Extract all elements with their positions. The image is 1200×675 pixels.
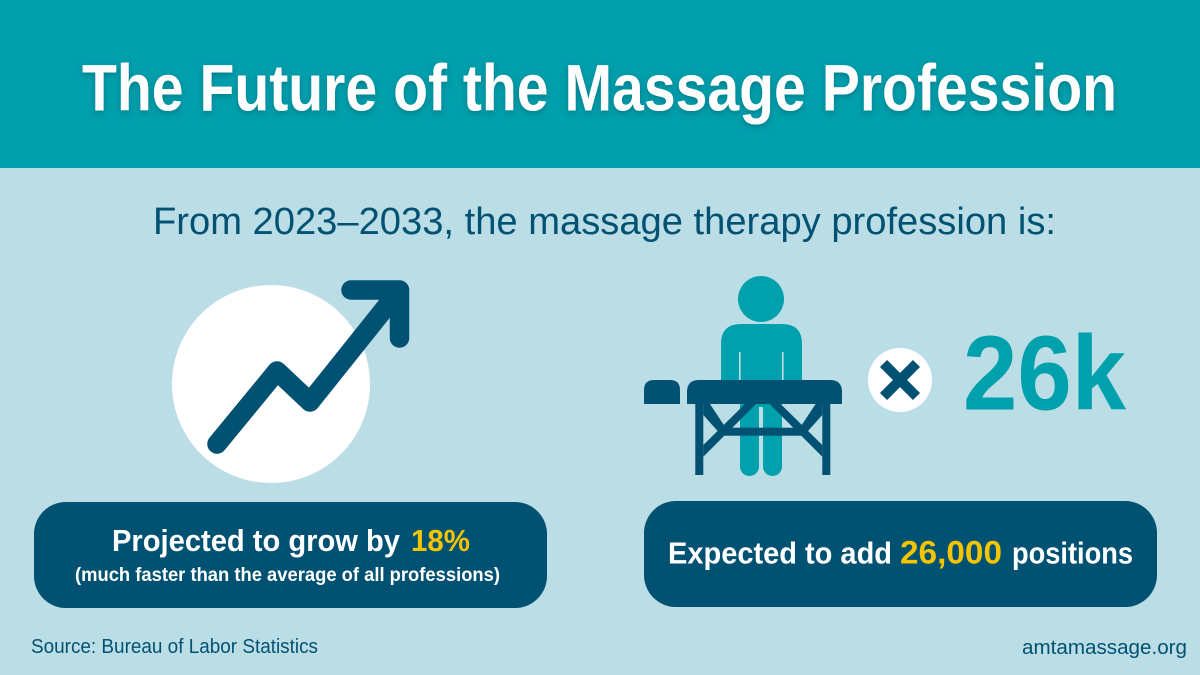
panel: growth callout bbox=[34, 502, 547, 608]
callout note: (much faster than the average of all professions) bbox=[75, 565, 500, 586]
callout text: Expected to add bbox=[668, 536, 892, 570]
stat: 26k: 26k bbox=[963, 314, 1127, 432]
callout headline: Projected to grow by bbox=[112, 523, 401, 558]
icon: growth arrow chart bbox=[172, 285, 400, 483]
therapist figure bbox=[721, 276, 802, 476]
callout text bbox=[668, 534, 1133, 570]
callout text: positions bbox=[1012, 536, 1133, 570]
icon: multiply sign bbox=[868, 348, 932, 412]
callout text: 26,000 bbox=[900, 534, 1002, 570]
callout headline: 18% bbox=[411, 523, 470, 558]
website: amtamassage.org bbox=[1022, 637, 1187, 659]
header banner bbox=[0, 0, 1200, 168]
panel: positions callout bbox=[644, 501, 1157, 607]
subtitle: From 2023–2033, the massage therapy profession is: bbox=[153, 201, 1056, 243]
icon: massage therapist at table bbox=[644, 276, 842, 476]
massage table bbox=[644, 380, 842, 475]
source note: Source: Bureau of Labor Statistics bbox=[31, 636, 318, 658]
